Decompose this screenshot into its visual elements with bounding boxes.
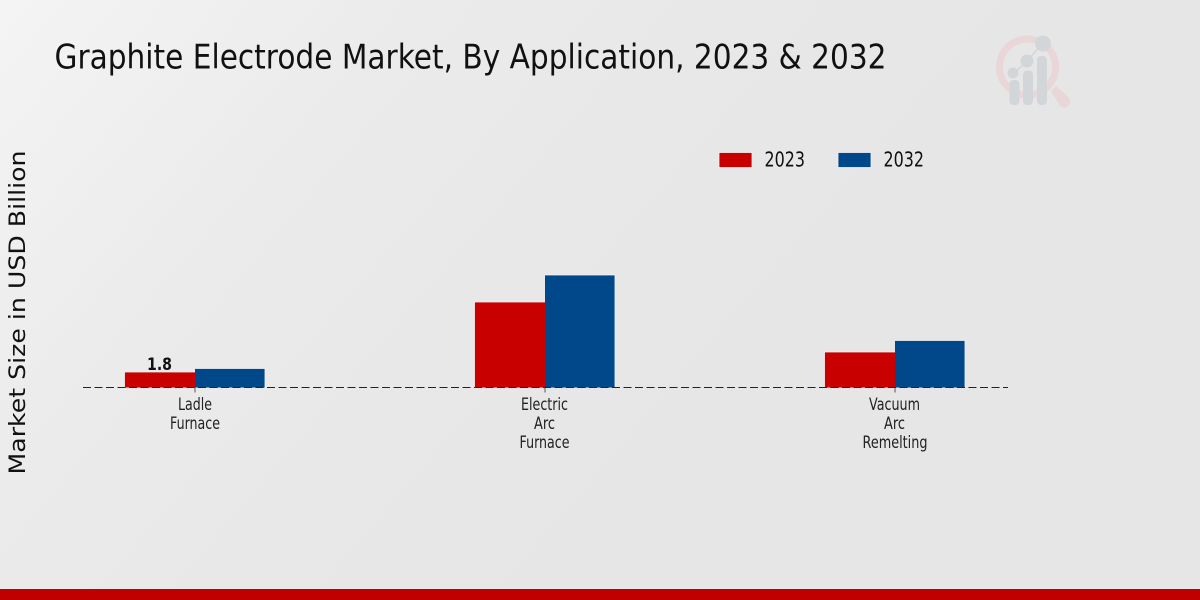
- bars: Vacuum Arc Remelting: [824, 340, 965, 388]
- legend label 2023: 2023: [764, 148, 805, 172]
- category label: Electric Arc Furnace: Furnace: [520, 433, 570, 452]
- legend: [719, 148, 924, 172]
- bar chart: [83, 275, 1008, 392]
- bars: Electric Arc Furnace: [474, 275, 615, 388]
- category label: Vacuum Arc Remelting: [862, 395, 928, 452]
- bars: Ladle Furnace: [124, 368, 265, 388]
- category label: Vacuum Arc Remelting: Remelting: [862, 433, 928, 452]
- legend label 2032: 2032: [884, 148, 924, 172]
- category label: Vacuum Arc Remelting: Arc: [884, 414, 905, 433]
- title: Graphite Electrode Market, By Application, 2023 & 2032: [54, 38, 886, 78]
- category label: Ladle Furnace: Furnace: [170, 414, 220, 433]
- legend swatch 2032: [838, 152, 871, 168]
- baseline: [83, 386, 1008, 388]
- category label: Electric Arc Furnace: Electric: [521, 395, 568, 414]
- category label: Vacuum Arc Remelting: Vacuum: [869, 395, 920, 414]
- ticks: [195, 388, 895, 392]
- footer bar: [0, 589, 1200, 600]
- y-axis label: Market Size in USD Billion: [5, 150, 31, 474]
- icon: watermark logo: [1000, 36, 1070, 108]
- legend swatch 2023: [719, 152, 752, 168]
- category label: Electric Arc Furnace: [520, 395, 570, 452]
- category label: Electric Arc Furnace: Arc: [534, 414, 555, 433]
- value label 1.8: 1.8: [147, 355, 172, 374]
- category label: Ladle Furnace: Ladle: [178, 395, 212, 414]
- category label: Ladle Furnace: [170, 395, 220, 433]
